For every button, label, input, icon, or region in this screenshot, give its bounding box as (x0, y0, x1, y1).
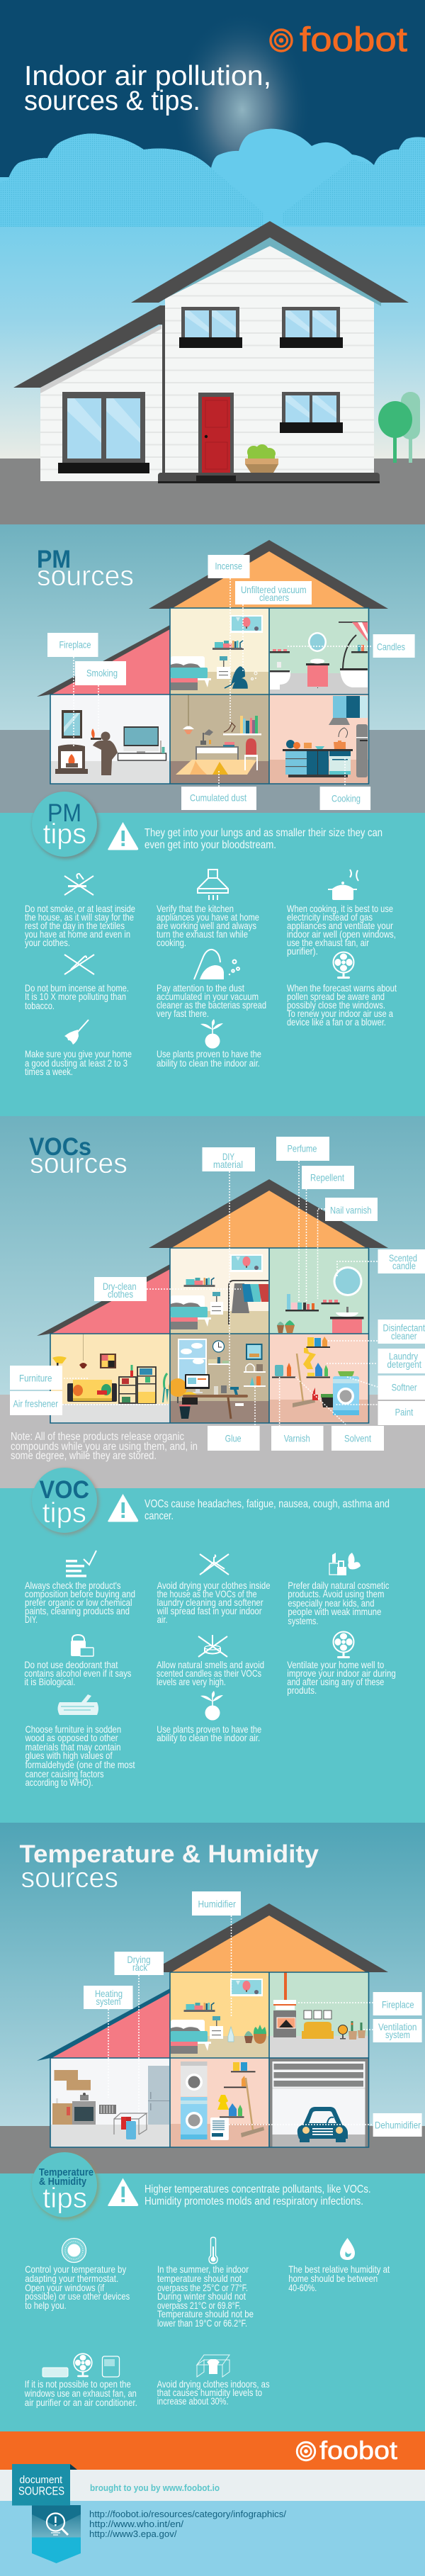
room: VOC bathroom (269, 1248, 368, 1334)
tip: ventilate: and after using any of these (287, 1676, 384, 1687)
label: Drying rack: rack (132, 1962, 148, 1973)
plant pot (245, 444, 278, 473)
label: Glue: Glue (225, 1433, 242, 1444)
tip: dusting: times a week. (25, 1066, 73, 1077)
tip: vacuum: very fast there. (157, 1008, 209, 1019)
tip: check composition: composition before buying and (25, 1588, 135, 1599)
tip: dusting (25, 1048, 132, 1077)
title: sources & tips. (24, 86, 200, 116)
tip: deodorant: it is Biological. (24, 1676, 75, 1687)
tip: deodorant (24, 1659, 131, 1687)
badge: PM tips: tips (42, 819, 86, 850)
label: Dry-clean clothes: Dry-clean (103, 1281, 136, 1292)
tip: cooking: indoor air well (open windows, (287, 928, 396, 940)
room: living room (50, 694, 170, 784)
tip: cooking: appliances and ventilate your (287, 920, 393, 931)
tip: cooking: use the exhaust fan, air (287, 937, 369, 948)
tip: dusting: Make sure you give your home (25, 1048, 132, 1059)
tip: drying clothes: air. (157, 1614, 168, 1625)
connector lines (62, 1161, 378, 1426)
frame (50, 1972, 368, 2147)
main wall (165, 246, 374, 473)
tip: exhaust fan: windows use an exhaust fan, an (24, 2387, 137, 2399)
label: Heating system (84, 1986, 133, 2009)
tip: kitchen appliances: Verify that the kitchen (157, 903, 234, 914)
intro text: even get into your bloodstream. (144, 839, 276, 851)
house: PM (37, 540, 388, 784)
label: Scented candle (378, 1249, 425, 1273)
tip: thermostat (25, 2263, 130, 2311)
label: Unfiltered vacuum cleaners: cleaners (259, 592, 289, 603)
tip: vacuum: Pay attention to the dust (157, 982, 244, 994)
tip: furniture: according to WHO). (26, 1777, 94, 1788)
label: Disinfectant cleaner: cleaner (391, 1330, 417, 1342)
logo: foobot (271, 21, 407, 59)
panel: VOC tips (0, 1468, 425, 1823)
heading: Temperature & Humidity sources: sources (21, 1862, 118, 1894)
label: Glue (208, 1426, 260, 1451)
label: Cumulated dust: Cumulated dust (190, 792, 246, 804)
room: VOC office (169, 1334, 269, 1423)
tip: summer and winter temperature: lower than 19°C or 66.2°F. (157, 2317, 247, 2329)
large window (58, 392, 149, 473)
tip: ventilate (287, 1659, 396, 1696)
label: Ventilation system: system (385, 2029, 410, 2040)
tip: plants: Use plants proven to have the (157, 1048, 261, 1059)
tip: summer and winter temperature: overpass the 25°C or 77°F. (157, 2282, 248, 2293)
icon: plant (200, 1019, 223, 1049)
label: Fireplace: Fireplace (382, 1998, 414, 2010)
room: garage (269, 2058, 368, 2147)
icons: air conditioner, fan, purifier (42, 2353, 119, 2377)
tip: do not smoke: Do not smoke, or at least inside (25, 903, 135, 914)
tip: furniture: wood as opposed to other (25, 1732, 118, 1743)
intro text (144, 1498, 390, 1522)
ribbon with magnifier icon (32, 2505, 81, 2563)
tip: do not smoke (25, 903, 135, 948)
room: study (170, 694, 269, 784)
tip: do not smoke: your clothes. (25, 937, 70, 948)
label: Paint (378, 1401, 425, 1425)
label: Unfiltered vacuum cleaners: Unfiltered vacuum (241, 584, 307, 595)
tip: thermostat: possible) or use other devices (25, 2290, 130, 2302)
source links: http://www.who.int/en/ (89, 2519, 183, 2529)
tip: incense: tobacco. (25, 1000, 55, 1011)
tip: exhaust fan (24, 2378, 137, 2408)
heading: VOCs sources: sources (30, 1148, 128, 1179)
label: Dehumidifier (373, 2113, 422, 2137)
heading: Temperature & Humidity sources: Temperature & Humidity (20, 1840, 319, 1868)
icon: warning (108, 822, 138, 850)
tip: plants (157, 1723, 261, 1743)
label: Dry-clean clothes: clothes (108, 1288, 133, 1300)
label: Nail varnish: Nail varnish (330, 1205, 371, 1216)
tip: summer and winter temperature: In the summer, the indoor (157, 2263, 249, 2275)
icon: no incense (64, 955, 94, 974)
tip: incense: Do not burn incense at home. (25, 982, 129, 994)
badge: Temperature & Humidity tips: Temperature (39, 2167, 94, 2178)
note (11, 1431, 198, 1462)
main roof (131, 221, 409, 303)
icon: wood log (58, 1694, 98, 1715)
tip: furniture: Choose furniture in sodden (26, 1723, 121, 1735)
trees (378, 392, 420, 463)
icon: deodorant (71, 1635, 94, 1656)
intro text (144, 827, 382, 851)
label: Fireplace (47, 633, 98, 657)
tip: exhaust fan: If it is not possible to open the (25, 2378, 131, 2390)
document sources tab (12, 2464, 77, 2506)
tip: plants (157, 1048, 261, 1069)
intro text: cancer. (144, 1510, 174, 1522)
tip: kitchen appliances: turn the exhaust fan while (157, 928, 248, 940)
door (198, 393, 234, 476)
label: Repellent: Repellent (310, 1172, 344, 1183)
label: Heating system: Heating (95, 1988, 123, 1999)
label: Smoking (75, 661, 126, 685)
label: Solvent (332, 1426, 384, 1451)
room: VOC living room (50, 1334, 170, 1423)
document sources tab: document (20, 2474, 63, 2486)
label: Fireplace: Fireplace (60, 639, 91, 651)
icon: water drop (340, 2238, 355, 2260)
logo: foobot: foobot (319, 2436, 397, 2465)
label: Ventilation system: Ventilation (378, 2021, 416, 2032)
tip: natural cosmetics: Prefer daily natural cosmetic (288, 1580, 389, 1591)
label: Candles (373, 634, 415, 658)
window lower right (280, 392, 343, 433)
tip: natural smells: Allow natural smells and avoid (157, 1659, 264, 1670)
icon: vacuum cleaner (193, 950, 239, 979)
room: bedroom (170, 608, 269, 694)
label: Disinfectant cleaner (378, 1320, 425, 1344)
tip: pollen: device like a fan or a blower. (287, 1016, 386, 1028)
tip: cooking: electricity instead of gas (287, 911, 373, 923)
tip: plants: Use plants proven to have the (157, 1723, 261, 1735)
tip: ventilate: produts. (287, 1684, 317, 1696)
tip: summer and winter temperature: During winter should not (157, 2290, 246, 2302)
tip: natural smells (157, 1659, 264, 1687)
tip: drying indoors: that causes humidity levels to (157, 2387, 262, 2398)
intro text: Humidity promotes molds and respiratory infections. (144, 2195, 363, 2207)
tip: drying clothes: will spread fast in your indoor (157, 1605, 262, 1616)
tip: dusting: a good dusting at least 2 to 3 (25, 1057, 128, 1069)
tip: relative humidity (288, 2263, 390, 2293)
room: kitchen (269, 694, 368, 784)
heading: Temperature & Humidity sources (20, 1840, 319, 1894)
label: DIY material: DIY (222, 1151, 234, 1162)
label: Solvent: Solvent (344, 1433, 371, 1444)
left wing wall (40, 325, 163, 481)
tip: do not smoke: you have at home and even in (25, 928, 130, 940)
room: laundry (170, 2058, 269, 2147)
icon: warning (108, 1494, 138, 1522)
label: Repellent (302, 1166, 354, 1189)
panel: PM tips (0, 792, 425, 1116)
icon: fan (333, 1631, 354, 1658)
icon: no hanger (200, 1554, 229, 1575)
heading: PM sources: sources (37, 561, 134, 592)
tip: kitchen appliances: are working well and always (157, 920, 256, 931)
label: Humidifier: Humidifier (198, 1898, 236, 1909)
label: Softner (378, 1376, 425, 1400)
downpipe (162, 305, 165, 473)
tip: drying clothes: Avoid drying your clothes inside (157, 1580, 271, 1591)
label: Ventilation system (373, 2019, 422, 2042)
label: Furniture (10, 1366, 62, 1390)
source links: http://foobot.io/resources/category/infographics/ (89, 2509, 286, 2519)
label: DIY material: material (213, 1159, 243, 1170)
tip: do not smoke: rest of the day in the textiles (25, 920, 125, 931)
frame (50, 1248, 368, 1423)
clouds (0, 129, 425, 227)
label: Cooking: Cooking (332, 792, 361, 804)
room: bathroom (269, 608, 368, 694)
tip: natural cosmetics: especially near kids, and (288, 1597, 374, 1609)
connector lines (108, 1916, 373, 2125)
badge: Temperature & Humidity tips: tips (42, 2183, 87, 2214)
step (158, 473, 380, 483)
note: Note: All of these products release organic (11, 1431, 184, 1443)
label: Humidifier (192, 1891, 241, 1916)
note: compounds while you are using them, and, in (11, 1441, 198, 1453)
icon: plant (200, 1691, 223, 1721)
label: Incense: Incense (215, 560, 242, 571)
roofs (37, 1903, 388, 2061)
tip: drying indoors: increase about 30%. (157, 2395, 229, 2407)
tip: drying clothes (157, 1580, 271, 1625)
tip: natural smells: scented candles as their VOCs (157, 1667, 261, 1679)
label: Cooking (320, 787, 370, 810)
icon: no candle (198, 1635, 227, 1657)
tip: pollen: pollen spread be aware and (287, 991, 385, 1002)
logo: foobot: foobot (300, 21, 407, 59)
tip: do not smoke: the house, as it will stay for the (25, 911, 134, 923)
tip: incense (25, 982, 129, 1011)
connector lines (74, 578, 373, 787)
room: VOC laundry (269, 1334, 368, 1423)
room: kitchen (50, 2058, 170, 2147)
tip: cooking (287, 903, 396, 957)
tip: drying clothes: laundry cleaning and softener (157, 1597, 264, 1608)
tip: pollen: To renew your indoor air use a (287, 1008, 393, 1019)
icon: kitchen hood (198, 870, 228, 900)
label: Varnish: Varnish (284, 1433, 310, 1444)
tip: pollen: When the forecast warns about (287, 982, 397, 994)
badge: PM tips (32, 792, 99, 859)
tip: natural cosmetics: products. Avoid using them (288, 1588, 384, 1599)
badge: Temperature & Humidity tips: & Humidity (39, 2176, 86, 2188)
panel: PM sources (0, 524, 425, 813)
icon: thermometer (209, 2237, 217, 2263)
heading: VOCs sources (29, 1133, 128, 1179)
tip: check composition: Always check the product's (25, 1580, 120, 1591)
house: Temperature & Humidity (37, 1903, 388, 2147)
tip: cooking: When cooking, it is best to use (287, 903, 393, 914)
label: Dry-clean clothes (94, 1277, 147, 1301)
under-eave (159, 237, 381, 306)
label: Air freshener (10, 1391, 62, 1415)
tip: check composition: DIY. (25, 1614, 38, 1625)
icon: duster (64, 1020, 89, 1045)
badge: VOC tips: tips (42, 1497, 86, 1529)
label: Perfume (276, 1137, 329, 1161)
label: Softner: Softner (392, 1382, 417, 1393)
heading: PM sources: PM (37, 546, 71, 573)
tip: drying indoors (157, 2378, 270, 2407)
tip: vacuum (157, 982, 266, 1019)
label: Cumulated dust (181, 787, 256, 810)
label: Heating system: system (96, 1996, 120, 2007)
tip: plants: ability to clean the indoor air. (157, 1732, 260, 1743)
badge: VOC tips: VOC (40, 1476, 89, 1504)
label: Scented candle: Scented (389, 1252, 417, 1264)
icon: natural cosmetics (329, 1553, 361, 1575)
tip: natural cosmetics: people with weak immune (288, 1606, 382, 1617)
tip: vacuum: cleaner as the bacterias spread (157, 999, 266, 1011)
title (24, 61, 271, 116)
tip: natural cosmetics (288, 1580, 389, 1626)
icon: warning (108, 2178, 138, 2206)
tip: plants: ability to clean the indoor air. (157, 1057, 260, 1069)
tip: exhaust fan: air purifier or an air conditioner. (25, 2397, 137, 2408)
room: humid bedroom (170, 1972, 269, 2058)
room: closet bedroom (170, 1248, 269, 1334)
panel: footer (0, 2431, 425, 2576)
illustration: house (13, 221, 420, 483)
badge: PM tips: PM (47, 799, 81, 827)
label: Unfiltered vacuum cleaners (235, 581, 312, 604)
tip: furniture: glues with high values of (26, 1750, 113, 1761)
tip: kitchen appliances: cooking. (157, 937, 186, 948)
tip: thermostat: Control your temperature by (25, 2263, 126, 2275)
label: Fireplace (373, 1992, 422, 2015)
title: Indoor air pollution, (24, 61, 271, 91)
tip: kitchen appliances (157, 903, 259, 948)
heading: PM sources (37, 546, 134, 592)
tip: summer and winter temperature: temperature should not (157, 2273, 242, 2284)
icon: thermostat (62, 2238, 86, 2262)
roofs (37, 540, 388, 697)
tip: natural cosmetics: systems. (288, 1615, 318, 1626)
frame (50, 608, 368, 784)
panel: Temperature & Humidity sources (0, 1823, 425, 2173)
source links: http://www3.epa.gov/ (89, 2529, 177, 2539)
tip: relative humidity: The best relative humidity at (288, 2263, 390, 2275)
label: Scented candle: candle (392, 1260, 416, 1271)
tip: pollen (287, 982, 397, 1028)
heading: VOCs sources: VOCs (29, 1133, 91, 1161)
label: Laundry detergent (378, 1349, 425, 1373)
icon: fan (333, 952, 354, 979)
icon: cooking pot (328, 870, 358, 900)
label: Nail varnish (325, 1198, 378, 1221)
tip: check composition (25, 1580, 135, 1625)
label: Furniture: Furniture (19, 1372, 52, 1383)
tip: natural smells: levels are very high. (157, 1676, 226, 1687)
panel: VOCs sources (0, 1116, 425, 1488)
badge: VOC tips (32, 1468, 99, 1535)
tip: summer and winter temperature: Temperature should not be (157, 2308, 254, 2319)
note: some degree, while they are stored. (11, 1450, 157, 1462)
icon: no smoking (64, 874, 94, 895)
left wing roof (13, 305, 164, 388)
panel: hero (0, 0, 425, 524)
tip: ventilate: Ventilate your home well to (287, 1659, 384, 1670)
document sources tab: SOURCES (18, 2485, 64, 2497)
tip: deodorant: contains alcohol even if it says (24, 1667, 131, 1679)
label: Incense (208, 555, 249, 578)
tip: relative humidity: 40-60%. (288, 2282, 317, 2293)
tip: incense: It is 10 X more polluting than (25, 991, 126, 1002)
label: DIY material (203, 1147, 255, 1171)
source links (89, 2509, 286, 2539)
tip: relative humidity: home should be between (288, 2273, 378, 2284)
label: Candles: Candles (377, 641, 405, 652)
tip: pollen: possibly close the windows. (287, 999, 385, 1011)
label: Perfume: Perfume (288, 1142, 317, 1154)
tip: drying clothes: the house as the VOCs of the (157, 1588, 257, 1599)
label: Laundry detergent: Laundry (389, 1351, 418, 1362)
tip: furniture: cancer causing factors (26, 1768, 104, 1779)
label: Drying rack: Drying (128, 1954, 150, 1965)
tip: thermostat: adapting your thermostat. (25, 2273, 118, 2284)
label: Smoking: Smoking (86, 668, 118, 679)
tip: ventilate: improve your indoor air during (287, 1667, 396, 1679)
panel: Temperature & Humidity tips (0, 2152, 425, 2431)
label: Varnish (271, 1426, 323, 1451)
tip: furniture: formaldehyde (one of the most (26, 1759, 135, 1770)
roofs (37, 1179, 388, 1336)
intro text: Higher temperatures concentrate pollutants, like VOCs. (144, 2183, 371, 2195)
credit line: brought to you by www.foobot.io (90, 2482, 220, 2493)
label: Paint: Paint (395, 1406, 413, 1417)
window upper right (280, 307, 343, 348)
tip: furniture (25, 1723, 135, 1788)
tip: thermostat: Open your windows (if (25, 2282, 104, 2293)
tip: drying indoors: Avoid drying clothes indoors, as (157, 2378, 270, 2390)
tip: check composition: prefer organic or low chemical (25, 1597, 132, 1608)
tip: summer and winter temperature: overpass 21°C or 69.8°F. (157, 2300, 241, 2311)
intro text (144, 2183, 371, 2207)
house: VOCs (37, 1179, 388, 1423)
tip: vacuum: accumulated in your vacuum (157, 991, 259, 1002)
tip: summer and winter temperature (157, 2263, 254, 2329)
label: Drying rack (115, 1952, 164, 1975)
tip: check composition: paints, cleaning products and (25, 1605, 130, 1616)
tip: cooking: purifier). (287, 945, 318, 957)
tip: kitchen appliances: appliances you have at home (157, 911, 259, 923)
tip: thermostat: to help you. (25, 2300, 67, 2311)
window upper left (179, 307, 242, 348)
icon: checklist (66, 1551, 96, 1577)
tip: furniture: materials that may contain (26, 1741, 121, 1753)
badge: Temperature & Humidity tips (32, 2152, 99, 2220)
room: fireplace lounge (269, 1972, 368, 2058)
label: Air freshener: Air freshener (13, 1397, 58, 1409)
icon: drying rack (197, 2355, 230, 2377)
tip: deodorant: Do not use deodorant that (24, 1659, 118, 1670)
